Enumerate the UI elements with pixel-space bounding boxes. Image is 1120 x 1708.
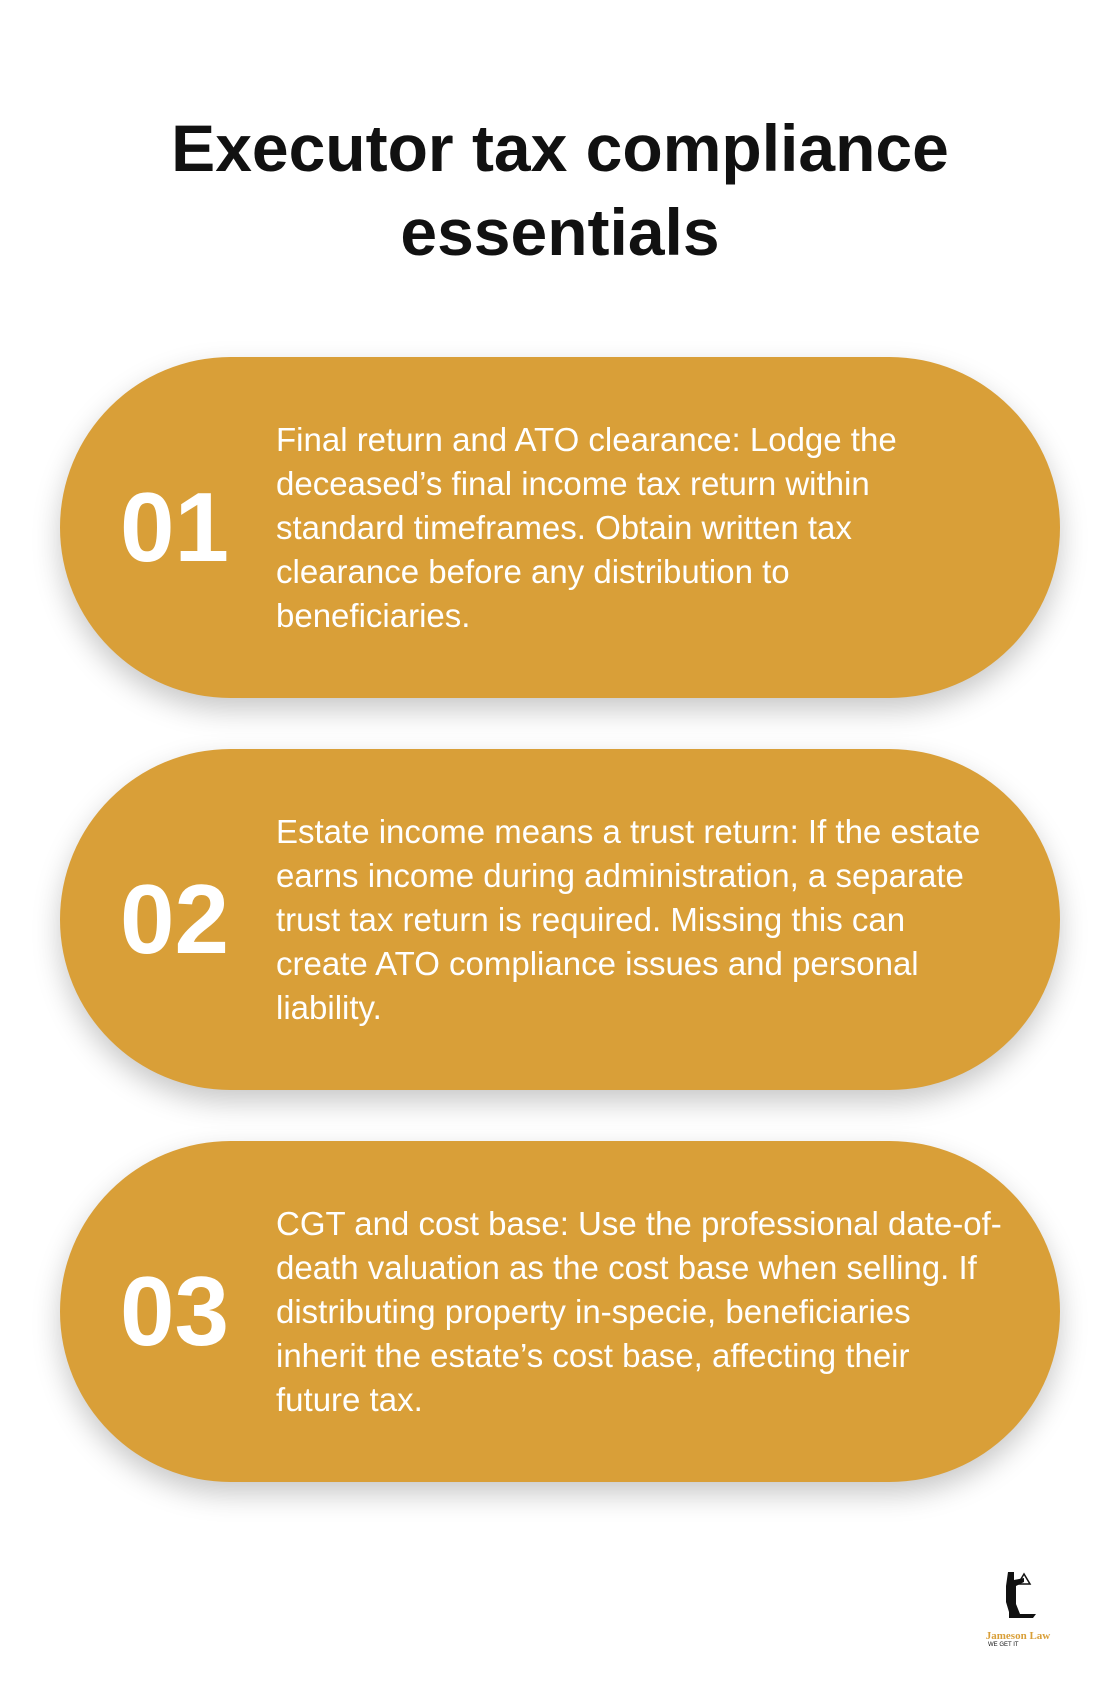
panel: step 03 xyxy=(60,1141,1060,1482)
text 01: Final return and ATO clearance: Lodge the xyxy=(276,421,897,458)
logo: WE GET IT xyxy=(988,1642,1019,1648)
text 01: clearance before any distribution to xyxy=(276,553,790,590)
text 01: standard timeframes. Obtain written tax xyxy=(276,509,852,546)
text 02: trust tax return is required. Missing this can xyxy=(276,901,905,938)
icon: lady justice xyxy=(1006,1572,1036,1618)
panel: step 01 xyxy=(60,357,1060,698)
text 03: CGT and cost base: Use the professional date-of- xyxy=(276,1205,1002,1242)
panel: step 02 xyxy=(60,749,1060,1090)
text 03: inherit the estate’s cost base, affecting their xyxy=(276,1337,910,1374)
text 03 xyxy=(276,1205,1002,1418)
text 02: liability. xyxy=(276,989,382,1026)
number 02: 02 xyxy=(120,864,229,974)
text 03: future tax. xyxy=(276,1381,423,1418)
number 03: 03 xyxy=(120,1256,229,1366)
logo xyxy=(986,1572,1050,1648)
title: essentials xyxy=(400,195,720,269)
text 01: beneficiaries. xyxy=(276,597,470,634)
brand text: Jameson Law xyxy=(986,1630,1050,1642)
number 01: 01 xyxy=(120,472,229,582)
text 03: death valuation as the cost base when selling. If xyxy=(276,1249,977,1286)
text 02 xyxy=(276,813,980,1026)
title: Executor tax compliance xyxy=(171,111,949,185)
text 01 xyxy=(276,421,897,634)
text 02: Estate income means a trust return: If the estate xyxy=(276,813,980,850)
text 02: earns income during administration, a separate xyxy=(276,857,964,894)
text 01: deceased’s final income tax return within xyxy=(276,465,870,502)
text 03: distributing property in-specie, beneficiaries xyxy=(276,1293,911,1330)
text 02: create ATO compliance issues and personal xyxy=(276,945,919,982)
title xyxy=(171,111,949,269)
